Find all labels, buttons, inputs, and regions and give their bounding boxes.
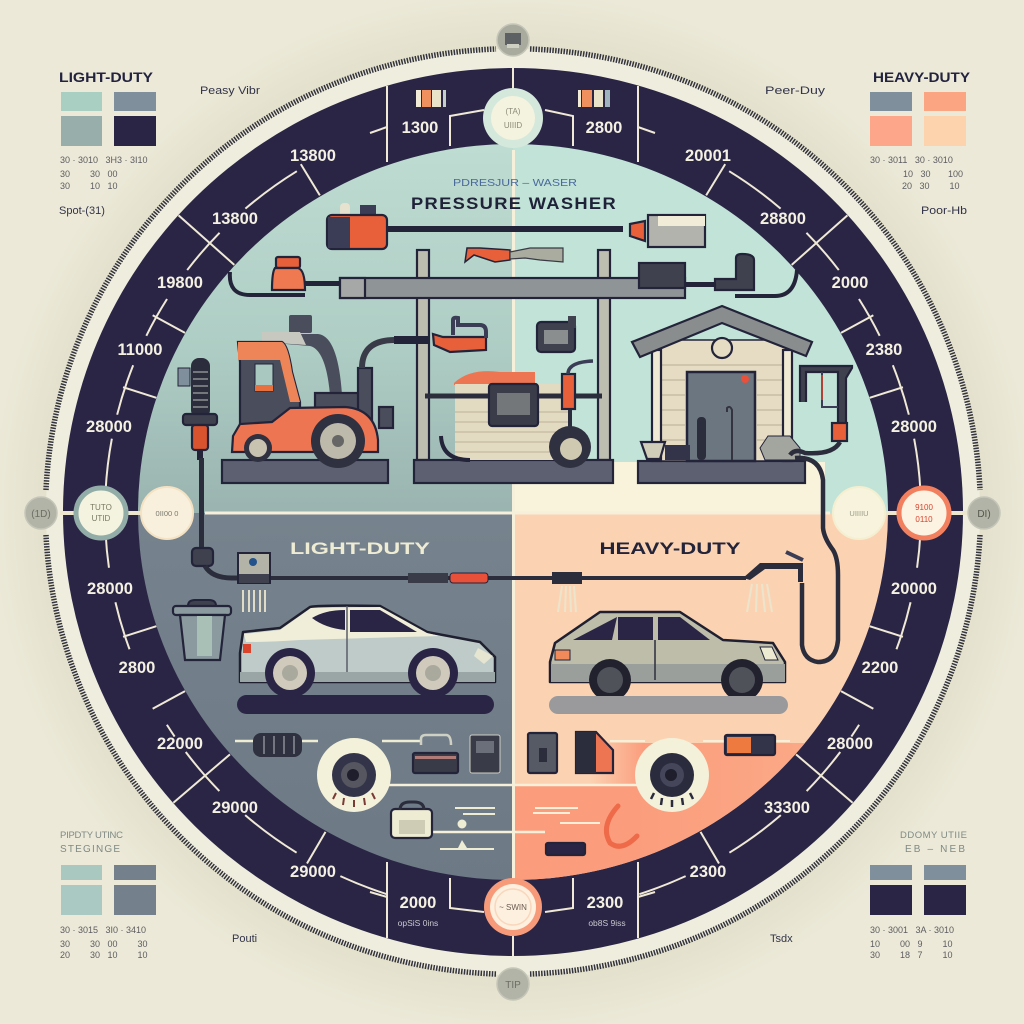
top pressure washer tool <box>327 203 705 249</box>
ring numbers <box>86 119 937 912</box>
node: top <box>483 88 543 148</box>
legend bottom left: 30 30 00 30 <box>60 939 148 949</box>
outer badge right <box>968 497 1000 529</box>
legend bottom right: DDOMY UTIIE <box>900 830 967 841</box>
node: right outer <box>899 488 949 538</box>
ring tick marks <box>105 110 921 914</box>
outer badge bottom <box>497 968 529 1000</box>
legend top left: 30 10 10 <box>60 181 118 191</box>
forklift <box>232 315 430 468</box>
legend top right: HEAVY-DUTY <box>873 69 971 85</box>
ring numbers: 2200 <box>862 659 898 677</box>
ring numbers: 13800 <box>212 210 258 228</box>
section label light-duty: LIGHT-DUTY <box>290 539 431 558</box>
label poor: Poor-Hb <box>921 205 967 217</box>
handle tool <box>465 248 510 262</box>
house shelf <box>638 461 805 483</box>
node: left inner <box>141 487 193 539</box>
node: top: UIIID <box>504 121 522 130</box>
legend top right: 10 30 100 <box>903 169 963 179</box>
dial ring <box>63 68 963 956</box>
legend top left: 30 30 00 <box>60 169 118 179</box>
ring numbers: 2300 <box>587 894 623 912</box>
ring numbers: 29000 <box>290 863 336 881</box>
left wand <box>178 358 217 566</box>
handle grey end <box>510 248 563 262</box>
ring numbers: 2380 <box>866 341 902 359</box>
node: left outer <box>76 488 126 538</box>
long hose right <box>790 442 840 662</box>
ring numbers: 20001 <box>685 147 731 165</box>
ring numbers: 20000 <box>891 580 937 598</box>
ring numbers: 28800 <box>760 210 806 228</box>
center machine <box>425 361 602 468</box>
ring numbers: 28000 <box>891 418 937 436</box>
outer badge left: (1D) <box>31 509 51 520</box>
mini bars in ring <box>416 90 610 107</box>
node: top: (TA) <box>506 107 521 116</box>
ring numbers: 11000 <box>118 341 162 359</box>
upper beam assembly <box>230 254 797 298</box>
title: PDRESJUR – WASER <box>453 177 577 189</box>
label peasy: Peasy Vibr <box>200 85 260 97</box>
outer badge right: DI) <box>977 509 991 520</box>
forklift shelf <box>222 460 388 483</box>
bucket <box>173 600 231 660</box>
small caption right bottom: ob8S 9iss <box>588 918 626 928</box>
legend bottom left: PIPDTY UTINC <box>60 830 123 841</box>
connector bars <box>60 511 968 515</box>
orange nozzle <box>433 318 486 352</box>
label peer: Peer-Duy <box>765 85 826 97</box>
brush circle right <box>635 738 709 812</box>
small device center <box>537 316 576 352</box>
spray gun right <box>800 366 852 441</box>
legend top left: 30 · 3010 3H3 · 3I10 <box>60 155 148 165</box>
center shelf <box>414 460 613 483</box>
brush circle left <box>317 738 391 812</box>
outer badge left <box>25 497 57 529</box>
ring numbers: 28000 <box>87 580 133 598</box>
garage house <box>632 306 812 461</box>
node: right inner <box>833 487 885 539</box>
outer badge top <box>497 24 529 56</box>
ring numbers: 2800 <box>119 659 155 677</box>
node: bottom <box>484 878 542 936</box>
label spot: Spot-(31) <box>59 205 105 217</box>
section label heavy-duty: HEAVY-DUTY <box>600 539 741 558</box>
node: left outer: UTID <box>92 514 111 523</box>
ring numbers: 22000 <box>157 735 203 753</box>
legend bottom right: 10 00 9 10 <box>870 939 953 949</box>
legend bottom left <box>60 830 156 960</box>
legend bottom right: 30 18 7 10 <box>870 950 953 960</box>
ring numbers: 33300 <box>764 799 810 817</box>
sedan shadow <box>237 695 494 714</box>
label tsdx: Tsdx <box>770 933 793 945</box>
legend bottom left: 30 · 3015 3I0 · 3410 <box>60 925 146 935</box>
legend top right: 30 · 3011 30 · 3010 <box>870 155 953 165</box>
ring numbers: 1300 <box>402 119 438 137</box>
central quadrants <box>130 140 893 883</box>
legend top left: LIGHT-DUTY <box>59 69 154 85</box>
sedan car <box>240 606 495 698</box>
legend bottom left: STEGINGE <box>60 844 120 855</box>
legend top right <box>870 69 971 191</box>
nozzle top right <box>743 552 803 582</box>
spray jets <box>243 584 772 612</box>
legend bottom right <box>870 830 967 960</box>
bottom row right icons <box>513 732 790 855</box>
outer badge bottom: TIP <box>505 980 521 991</box>
legend top left <box>59 69 156 191</box>
label pouti: Pouti <box>232 933 257 945</box>
wagon shadow <box>549 696 788 714</box>
ring numbers: 19800 <box>157 274 203 292</box>
wagon car <box>550 612 785 701</box>
legend top right: 20 30 10 <box>902 181 960 191</box>
legend bottom right: EB – NEB <box>905 844 965 855</box>
ring numbers: 2800 <box>586 119 622 137</box>
pipe line middle <box>205 553 746 584</box>
ring numbers: 28000 <box>86 418 132 436</box>
node: right outer: 0110 <box>915 515 933 524</box>
ring numbers: 2000 <box>832 274 868 292</box>
bottom row left icons <box>235 733 500 849</box>
ring numbers: 2300 <box>690 863 726 881</box>
node: bottom: ~ SWIN <box>499 903 527 912</box>
node: right outer: 9100 <box>915 503 933 512</box>
title <box>411 177 617 213</box>
node: right inner: UIIIIU <box>849 509 869 518</box>
title: PRESSURE WASHER <box>411 195 617 213</box>
legend bottom right: 30 · 3001 3A · 3010 <box>870 925 954 935</box>
ring numbers: 2000 <box>400 894 436 912</box>
ring numbers: 29000 <box>212 799 258 817</box>
ring numbers: 28000 <box>827 735 873 753</box>
ring numbers: 13800 <box>290 147 336 165</box>
columns <box>417 250 610 460</box>
node: left outer: TUTO <box>90 503 112 512</box>
legend bottom left: 20 30 10 10 <box>60 950 148 960</box>
node: left inner: 0II00 0 <box>156 509 178 518</box>
small caption left bottom: opSiS 0ins <box>398 918 438 928</box>
